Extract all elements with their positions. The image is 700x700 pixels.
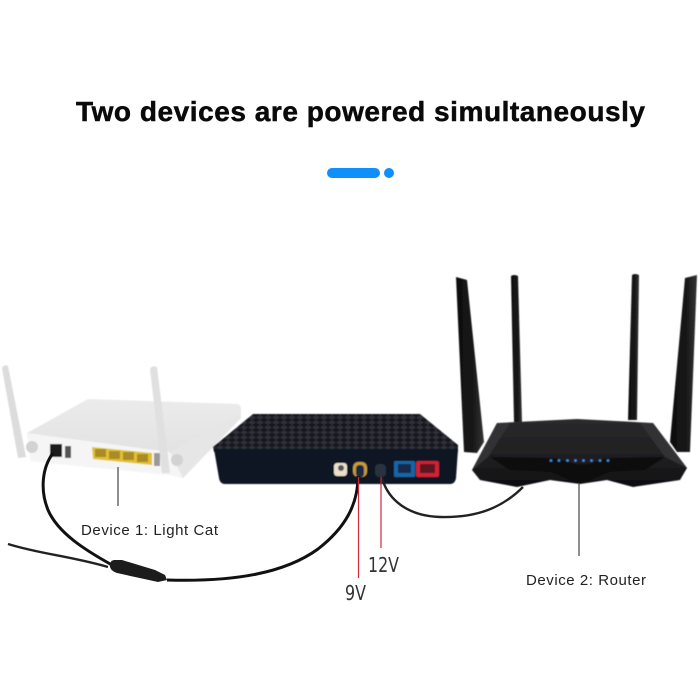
device 2 pointer line [578, 484, 580, 556]
device 1 pointer line [117, 467, 119, 506]
title accent: blue pill and dot [327, 168, 394, 178]
inline cable controller [110, 560, 167, 582]
power bank: central dark box [213, 414, 458, 484]
router side facets [472, 423, 687, 470]
9V label: 9V [345, 581, 366, 605]
router LEDs [550, 459, 609, 462]
beige port [334, 463, 347, 476]
9V red marker line [358, 477, 360, 578]
device 2: black router [456, 274, 697, 487]
router front lip [490, 457, 665, 484]
input cable on left [8, 544, 108, 567]
modem body [26, 399, 241, 478]
left antenna [2, 365, 26, 458]
blue network port [394, 461, 415, 477]
box top face [213, 414, 458, 452]
title: Two devices are powered simultaneously [76, 96, 645, 127]
yellow ethernet ports [92, 447, 152, 465]
right antenna [150, 366, 183, 473]
router antennas [456, 274, 697, 453]
device 1 label: Device 1: Light Cat [81, 522, 219, 539]
12V port [375, 464, 386, 477]
cable from controller to modem [43, 453, 112, 565]
9V port [353, 462, 367, 477]
black cable port and USB port [50, 444, 160, 466]
12V red marker line [380, 477, 382, 548]
cable from power bank 9V to controller [167, 476, 358, 580]
box front face [214, 449, 458, 484]
device 1: white light cat modem [2, 365, 241, 478]
router body [472, 419, 687, 487]
red network port [416, 461, 439, 477]
cable from power bank 12V to router [382, 478, 523, 517]
device 2 label: Device 2: Router [526, 572, 646, 589]
12V label: 12V [368, 553, 399, 577]
